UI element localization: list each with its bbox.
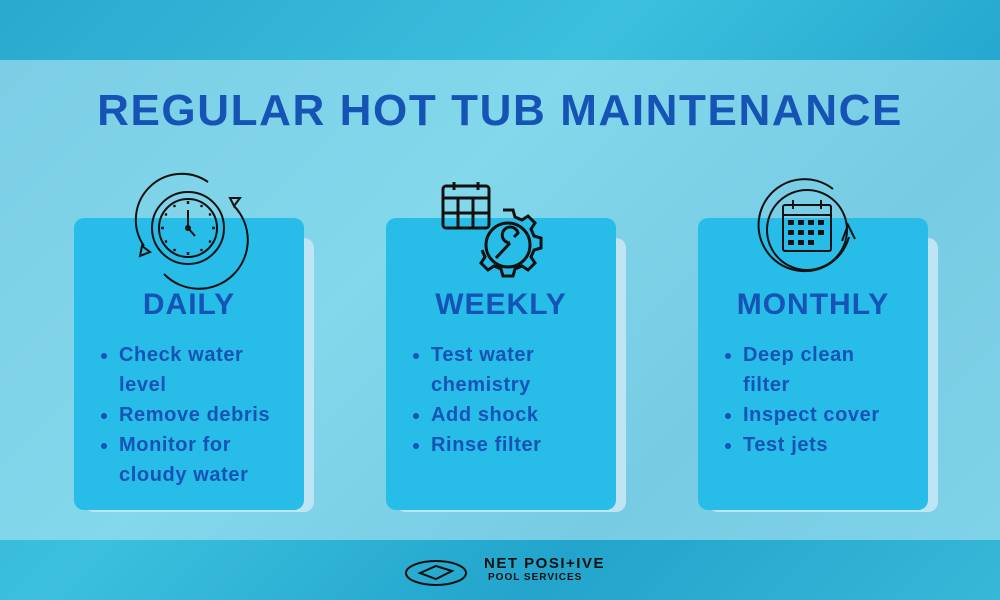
list: weekly tasks <box>413 344 542 456</box>
list: weekly tasks: Rinse filter <box>431 434 542 456</box>
list: weekly tasks: Test water chemistry <box>431 344 534 396</box>
title: REGULAR HOT TUB MAINTENANCE <box>97 86 903 135</box>
icon: calendar with arrow <box>758 178 856 272</box>
logo: Net Positive Pool Services: NET POSI+IVE <box>484 555 605 572</box>
logo: Net Positive Pool Services: POOL SERVICES <box>488 572 582 583</box>
list: monthly tasks <box>725 344 880 456</box>
list: daily tasks <box>101 344 270 486</box>
list: monthly tasks: Inspect cover <box>743 404 880 426</box>
list: daily tasks: Remove debris <box>119 404 270 426</box>
list: monthly tasks: Deep clean filter <box>743 344 855 396</box>
logo: Net Positive Pool Services <box>405 555 605 586</box>
list: weekly tasks: Add shock <box>431 404 539 426</box>
heading: monthly: MONTHLY <box>737 288 889 321</box>
card: daily <box>74 218 314 512</box>
list: monthly tasks: Test jets <box>743 434 828 456</box>
icon: calendar and gear <box>442 182 542 278</box>
list: daily tasks: Check water level <box>119 344 243 396</box>
list: daily tasks: Monitor for cloudy water <box>119 434 248 486</box>
card: monthly <box>698 218 938 512</box>
heading: daily: DAILY <box>143 288 235 321</box>
heading: weekly: WEEKLY <box>435 288 567 321</box>
card: weekly <box>386 218 626 512</box>
icon: clock with arrows <box>134 172 249 290</box>
